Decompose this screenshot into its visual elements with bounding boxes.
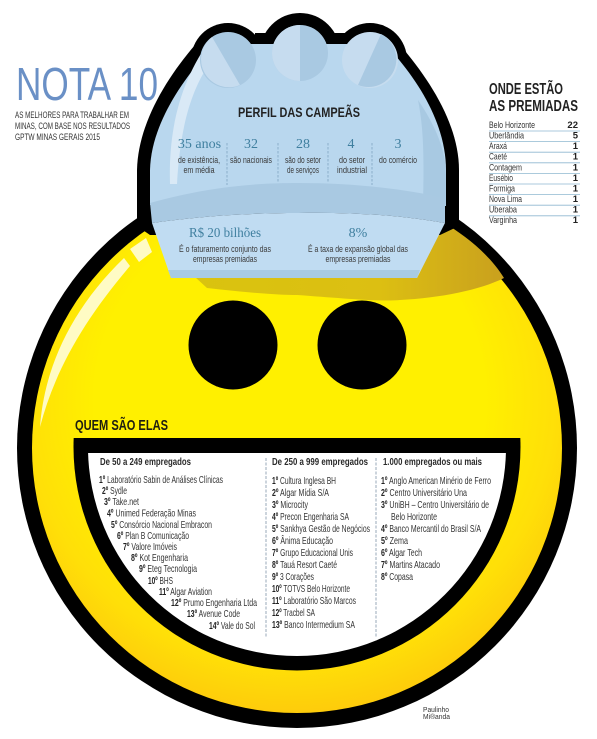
stat: 8%: empresas premiadas	[326, 254, 391, 265]
list: de 50 a 249 empregados: 8º Kot Engenharia	[131, 552, 188, 564]
list: de 50 a 249 empregados: 11º Algar Aviation	[159, 586, 212, 598]
stat: 28: são do setor	[285, 155, 321, 166]
hat bumps	[200, 25, 398, 88]
table: cities: Contagem	[489, 162, 522, 174]
stat: 4	[337, 137, 367, 176]
stat: 8%	[308, 226, 408, 265]
stat: 28: 28	[296, 137, 310, 152]
panel: onde estão as premiadas	[489, 78, 580, 226]
list: de 250 a 999 empregados: 1º Cultura Inglesa BH	[272, 475, 336, 487]
stat: 35 anos: de existência,	[178, 155, 220, 166]
subtitle text: MINAS, COM BASE NOS RESULTADOS	[15, 121, 130, 132]
table: cities: Varginha	[489, 215, 518, 226]
table: cities: Uberlândia	[489, 130, 525, 142]
stat: 32: são nacionais	[230, 155, 272, 166]
table: cities: 22	[567, 120, 578, 131]
table: cities: Araxá	[489, 141, 508, 152]
eye: right	[318, 300, 406, 390]
list: 1.000 empregados ou mais: 1.000 empregados ou mais	[383, 456, 482, 468]
stat: R$ 20 bilhões: É o faturamento conjunto das	[179, 244, 271, 255]
list: de 250 a 999 empregados: 3º Microcity	[272, 499, 308, 511]
stat: 8%: 8%	[349, 226, 368, 241]
stat: 35 anos: 35 anos	[178, 137, 221, 152]
subtitle text: GPTW MINAS GERAIS 2015	[15, 132, 100, 143]
table: cities: 1	[573, 162, 579, 174]
list: de 250 a 999 empregados: 10º TOTVS Belo Horizonte	[272, 583, 350, 595]
list: 1.000 empregados ou mais: 1º Anglo American Minério de Ferro	[381, 475, 491, 487]
list: de 50 a 249 empregados: 3º Take.net	[104, 496, 139, 508]
list: de 50 a 249 empregados: 4º Unimed Federação Minas	[107, 508, 196, 520]
hard hat	[137, 13, 459, 278]
stat: 3	[379, 137, 417, 166]
hat dome	[150, 44, 446, 205]
list: de 250 a 999 empregados: 2º Algar Mídia S/A	[272, 487, 329, 499]
heading: onde estão: ONDE ESTÃO	[489, 78, 563, 98]
mouth	[74, 438, 520, 670]
list: de 250 a 999 empregados: 7º Grupo Educacional Unis	[272, 547, 353, 559]
list: 1.000 empregados ou mais	[381, 456, 491, 583]
hat shadow	[195, 223, 504, 301]
table: cities: Uberaba	[489, 204, 518, 216]
list: de 50 a 249 empregados: 9º Eteg Tecnologia	[139, 563, 197, 575]
stat: 35 anos: em média	[184, 165, 215, 176]
hat brim band	[150, 183, 445, 223]
hat outline	[137, 13, 459, 235]
table: cities: Caeté	[489, 152, 507, 162]
table: cities: Nova Lima	[489, 194, 523, 205]
list: de 50 a 249 empregados: 12º Prumo Engenharia Ltda	[171, 597, 257, 609]
table: cities: 1	[573, 173, 579, 184]
list: de 250 a 999 empregados: 4º Precon Engenharia SA	[272, 511, 349, 523]
stat: 32: 32	[244, 137, 258, 152]
heading: quem são elas: QUEM SÃO ELAS	[75, 416, 168, 434]
list: de 250 a 999 empregados: 9º 3 Corações	[272, 571, 314, 583]
credit: Paulinho	[423, 707, 449, 714]
heading: onde estão	[489, 78, 578, 115]
title: NOTA 10	[16, 58, 158, 110]
list: de 50 a 249 empregados: De 50 a 249 empregados	[100, 456, 191, 468]
stat: R$ 20 bilhões	[179, 226, 271, 265]
highlight on face	[40, 238, 152, 427]
table: cities	[489, 120, 580, 226]
list: de 50 a 249 empregados: 2º Sydle	[102, 485, 127, 497]
list: de 250 a 999 empregados: 12º Tracbel SA	[272, 607, 315, 619]
list: de 250 a 999 empregados: 13º Banco Intermedium SA	[272, 619, 355, 631]
list: de 50 a 249 empregados: 1º Laboratório Sabin de Análises Clínicas	[99, 474, 223, 486]
credit: Mi®anda	[423, 713, 450, 721]
table: cities: 1	[573, 194, 579, 205]
list: de 250 a 999 empregados: 5º Sankhya Gestão de Negócios	[272, 523, 370, 535]
stat: 4: 4	[348, 137, 354, 152]
table: cities: 1	[573, 204, 579, 216]
stat: 28	[285, 137, 321, 176]
list: de 250 a 999 empregados: De 250 a 999 empregados	[272, 456, 368, 468]
stat: 3: 3	[394, 137, 402, 152]
list: de 50 a 249 empregados: 7º Valore Imóveis	[123, 541, 177, 553]
list: de 250 a 999 empregados: 11º Laboratório São Marcos	[272, 595, 356, 607]
stat: 4: industrial	[337, 165, 367, 176]
stat: 4: do setor	[339, 155, 365, 166]
stat: 35 anos	[178, 137, 221, 176]
list: de 250 a 999 empregados: 6º Ânima Educação	[272, 534, 333, 547]
table: cities: 1	[573, 215, 579, 226]
table: cities: 1	[573, 141, 579, 152]
table: cities: Eusébio	[489, 173, 513, 184]
stat: 32	[230, 137, 272, 166]
stat: R$ 20 bilhões: empresas premiadas	[193, 254, 257, 265]
stat: R$ 20 bilhões: R$ 20 bilhões	[189, 226, 261, 241]
list: 1.000 empregados ou mais: 3º UniBH – Centro Universitário de	[381, 499, 489, 511]
table: cities: Belo Horizonte	[489, 120, 535, 131]
stat: 28: de serviços	[287, 165, 319, 176]
list: 1.000 empregados ou mais: 4º Banco Mercantil do Brasil S/A	[381, 523, 481, 535]
list: 1.000 empregados ou mais: 5º Zema	[381, 535, 408, 547]
list: 1.000 empregados ou mais: Belo Horizonte	[391, 511, 437, 523]
table: cities: 1	[573, 184, 579, 194]
list: de 250 a 999 empregados: 8º Tauá Resort Caeté	[272, 559, 337, 571]
stat: 3: do comércio	[379, 155, 417, 166]
list: 1.000 empregados ou mais: 2º Centro Universitário Una	[381, 487, 467, 499]
list: 1.000 empregados ou mais: 8º Copasa	[381, 571, 413, 583]
subtitle text: AS MELHORES PARA TRABALHAR EM	[15, 110, 129, 121]
table: cities: 1	[573, 152, 579, 162]
list: de 50 a 249 empregados: 5º Consórcio Nacional Embracon	[111, 519, 212, 531]
eye: left	[188, 300, 278, 390]
stat: 8%: É a taxa de expansão global das	[308, 244, 408, 255]
credit	[423, 707, 450, 721]
list: de 50 a 249 empregados	[99, 456, 257, 632]
list: de 50 a 249 empregados: 14º Vale do Sol	[209, 620, 255, 632]
table: cities: 5	[573, 130, 579, 142]
hat lower brim	[152, 213, 445, 278]
table: cities: Formiga	[489, 184, 516, 194]
list: 1.000 empregados ou mais: 7º Martins Atacado	[381, 559, 440, 571]
list: 1.000 empregados ou mais: 6º Algar Tech	[381, 547, 422, 559]
list: de 50 a 249 empregados: 13º Avenue Code	[187, 608, 240, 620]
subtitle text	[15, 110, 130, 143]
smiley face	[17, 168, 577, 728]
list: de 250 a 999 empregados	[272, 456, 370, 631]
list: de 50 a 249 empregados: 10º BHS	[148, 575, 173, 587]
hat highlight	[170, 40, 212, 184]
list: de 50 a 249 empregados: 6º Plan B Comunicação	[117, 530, 189, 542]
heading: perfil das campeãs: PERFIL DAS CAMPEÃS	[238, 103, 360, 120]
